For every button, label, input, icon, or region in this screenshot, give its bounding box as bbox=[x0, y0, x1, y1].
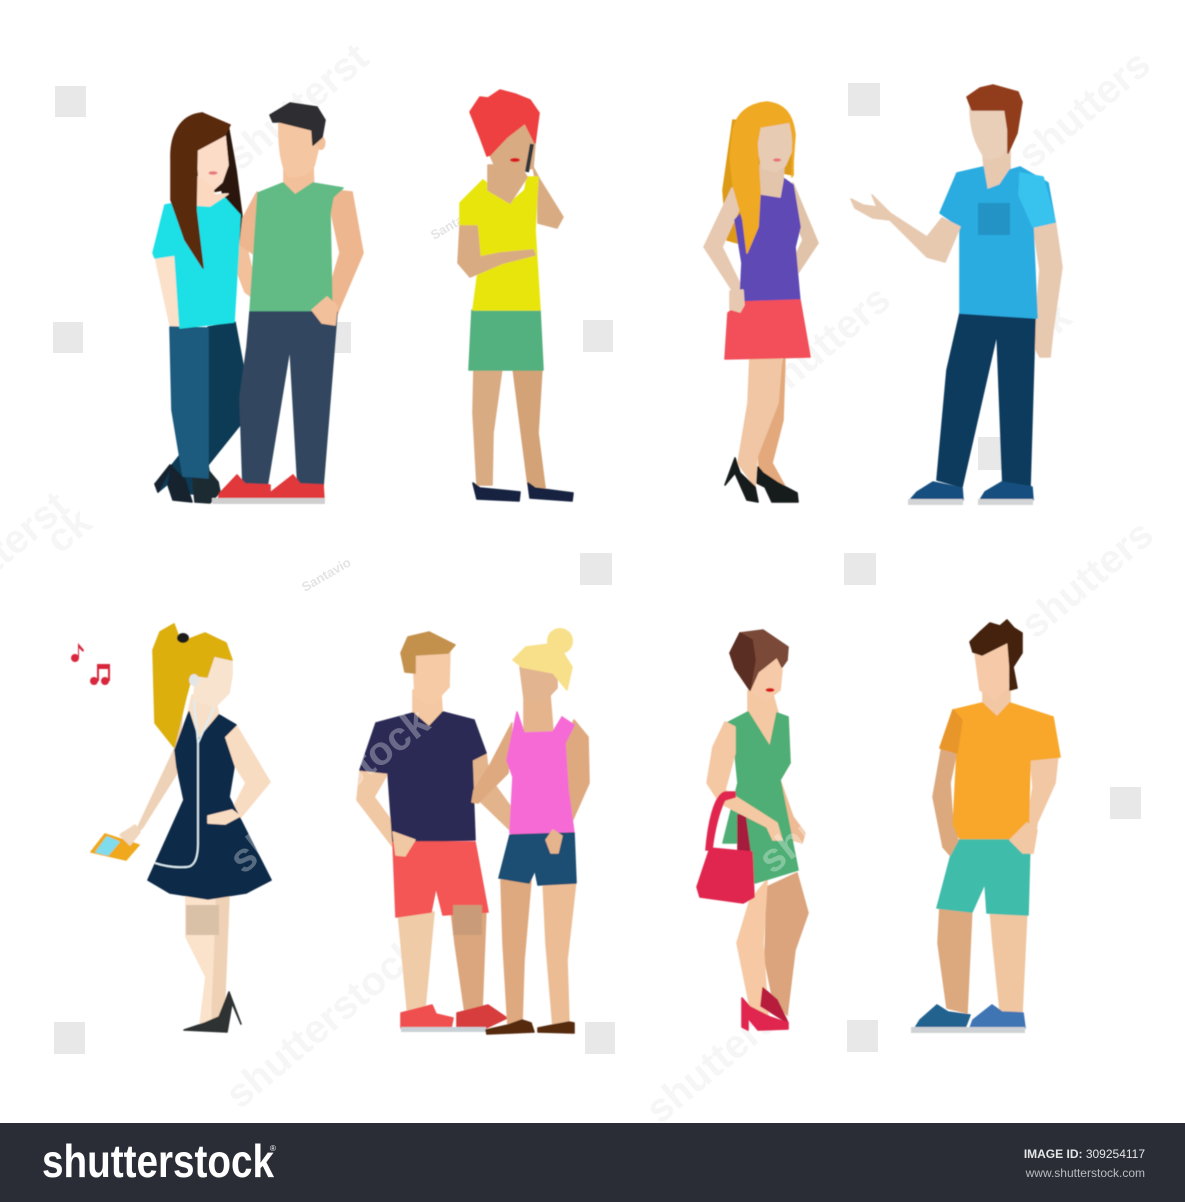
phone arm bbox=[533, 167, 563, 228]
green skirt bbox=[469, 310, 543, 370]
watermark square on shirt bbox=[978, 203, 1010, 235]
right arm bbox=[1010, 755, 1058, 853]
woman rear leg and shoes bbox=[155, 322, 243, 503]
man left arm bbox=[357, 770, 415, 855]
woman neck bbox=[194, 175, 228, 206]
woman back hair bbox=[172, 113, 247, 255]
neck bbox=[188, 695, 219, 742]
head bbox=[975, 642, 1010, 700]
man right arm bbox=[472, 753, 513, 830]
earphone cable bbox=[155, 700, 215, 867]
front hair bbox=[730, 102, 795, 253]
figure: woman in navy dress with ponytail and phone bbox=[71, 624, 271, 1032]
man hand in pocket bbox=[312, 297, 337, 325]
watermark text over figures bbox=[221, 699, 912, 882]
watermark layer: shutters bbox=[1010, 42, 1159, 177]
legs bbox=[938, 906, 1027, 1013]
watermark layer: Santavio bbox=[299, 554, 353, 595]
woman face bbox=[197, 135, 228, 190]
registered mark: ® bbox=[270, 1144, 276, 1153]
rear leg bbox=[765, 873, 808, 1015]
woman legs bbox=[501, 880, 576, 1027]
sleeve bbox=[1019, 173, 1055, 227]
rear leg bbox=[758, 355, 787, 490]
woman left arm around man bbox=[472, 723, 512, 803]
figure: woman in green dress with red handbag bbox=[697, 630, 808, 1030]
hands bbox=[943, 823, 1037, 855]
watermark text over figures: shutterst bbox=[750, 742, 912, 882]
man ear bbox=[316, 136, 326, 150]
head bbox=[970, 107, 1010, 159]
figure: woman on phone, red hair bbox=[458, 90, 573, 501]
high heels bbox=[184, 992, 241, 1032]
woman far arm bbox=[230, 240, 253, 298]
yellow shirt bbox=[460, 177, 540, 310]
hair bbox=[178, 633, 232, 697]
ponytail bbox=[153, 624, 186, 747]
navy tee bbox=[360, 712, 486, 842]
neck bbox=[760, 165, 784, 197]
woman neck bbox=[524, 695, 553, 733]
brown hair bbox=[967, 85, 1022, 153]
face bbox=[490, 122, 535, 174]
sneakers bbox=[908, 482, 1033, 505]
watermark layer: shutterst bbox=[638, 988, 797, 1132]
neck bbox=[983, 688, 1010, 717]
figure: man in orange tee and teal shorts bbox=[911, 620, 1060, 1033]
neck bbox=[983, 148, 1010, 190]
man green tank bbox=[250, 183, 343, 312]
man neck bbox=[413, 690, 443, 727]
legs bbox=[473, 368, 545, 488]
right arm bbox=[1032, 220, 1062, 357]
figure: woman in purple top and coral skirt bbox=[704, 102, 818, 502]
footer logo: shutterstock bbox=[42, 1135, 274, 1187]
phone bbox=[527, 144, 532, 172]
watermark layer: ck bbox=[38, 499, 100, 562]
red shorts bbox=[393, 842, 488, 917]
dark brown hair bbox=[970, 620, 1022, 690]
figure: man in blue t-shirt gesturing bbox=[851, 85, 1062, 505]
man legs bbox=[398, 908, 486, 1017]
face bbox=[747, 657, 782, 700]
music notes bbox=[71, 643, 110, 685]
pink top bbox=[507, 712, 574, 840]
teal shorts bbox=[937, 840, 1030, 915]
left arm with hand bbox=[122, 717, 182, 842]
right arm bbox=[786, 183, 818, 273]
left arm bbox=[707, 722, 782, 840]
woman lips bbox=[208, 171, 218, 175]
face bbox=[194, 657, 232, 707]
man hair bbox=[401, 632, 455, 673]
dark sleeve bbox=[940, 710, 962, 753]
man neck bbox=[284, 165, 314, 195]
navy shorts bbox=[499, 833, 576, 885]
lips bbox=[510, 158, 520, 162]
left arm bbox=[933, 746, 957, 855]
jeans bbox=[937, 313, 1035, 487]
handbag bbox=[697, 792, 754, 903]
watermark text over figures: shutterstock bbox=[221, 699, 438, 882]
front leg bbox=[186, 895, 215, 1025]
footer bar bbox=[0, 1123, 1185, 1202]
watermark layer: Santavio bbox=[428, 202, 482, 243]
lips bbox=[773, 158, 781, 162]
holding arm bbox=[458, 226, 535, 277]
blue sneakers bbox=[911, 1005, 1025, 1033]
man navy trousers bbox=[240, 312, 337, 487]
rear leg bbox=[205, 895, 229, 1023]
green dress bbox=[723, 712, 798, 883]
woman right arm bbox=[546, 720, 589, 853]
watermark layer: ck bbox=[1018, 294, 1080, 357]
red heels bbox=[742, 988, 788, 1030]
face bbox=[757, 122, 792, 172]
front leg bbox=[737, 880, 768, 1017]
figure: couple, woman in cyan top and man in green tank bbox=[153, 103, 363, 504]
neck bbox=[488, 165, 527, 203]
navy dress bbox=[148, 712, 271, 899]
hair tie bbox=[177, 633, 189, 643]
flats bbox=[473, 483, 573, 501]
man head bbox=[413, 647, 450, 705]
watermark layer: shutterstock bbox=[218, 928, 430, 1117]
watermark layer: shutters bbox=[1013, 512, 1162, 647]
hair bbox=[730, 630, 788, 690]
man red shoes bbox=[401, 1005, 507, 1032]
brown flats bbox=[486, 1020, 574, 1034]
dark bag strap bbox=[738, 815, 750, 852]
red hair bbox=[470, 90, 539, 156]
knee watermark square bbox=[453, 905, 482, 935]
watermark layer: shutters bbox=[750, 277, 899, 412]
blue shirt bbox=[940, 167, 1055, 318]
music player bbox=[91, 834, 139, 860]
right arm bbox=[775, 717, 805, 843]
hand on hip bbox=[208, 810, 240, 824]
woman bun bbox=[547, 628, 573, 654]
woman hair bbox=[513, 643, 572, 690]
hand bbox=[120, 825, 140, 845]
image id: IMAGE ID: 309254117 bbox=[1024, 1147, 1145, 1161]
knee watermark square bbox=[186, 905, 219, 935]
back hair bbox=[723, 120, 793, 245]
coral skirt bbox=[725, 300, 810, 359]
woman cyan shirt bbox=[153, 194, 240, 328]
man head bbox=[279, 116, 319, 177]
gesturing arm bbox=[851, 195, 960, 262]
woman front hair bbox=[171, 113, 230, 268]
hand over shorts bbox=[546, 830, 562, 853]
hand bbox=[730, 290, 744, 312]
watermark layer: shutterst bbox=[218, 35, 377, 179]
woman near arm bbox=[155, 256, 190, 342]
man red shoes and soles bbox=[212, 475, 325, 504]
figure: couple, man in navy tee and woman in pink tank bbox=[357, 628, 589, 1034]
right arm bbox=[205, 725, 270, 823]
neck bbox=[748, 690, 780, 747]
woman face bbox=[520, 667, 557, 703]
lips bbox=[766, 688, 774, 692]
left arm bbox=[704, 188, 743, 310]
orange tee bbox=[940, 703, 1060, 842]
ear bbox=[1008, 121, 1016, 135]
man arm behind bbox=[240, 192, 257, 255]
purple top bbox=[735, 178, 800, 302]
front leg bbox=[738, 355, 782, 487]
earbud bbox=[189, 674, 199, 686]
man hand bbox=[393, 832, 415, 856]
black heels bbox=[725, 458, 798, 502]
man hair bbox=[270, 103, 325, 145]
man right arm bbox=[312, 190, 363, 325]
website: www.shutterstock.com bbox=[1025, 1166, 1145, 1180]
woman jeans bbox=[170, 327, 208, 478]
